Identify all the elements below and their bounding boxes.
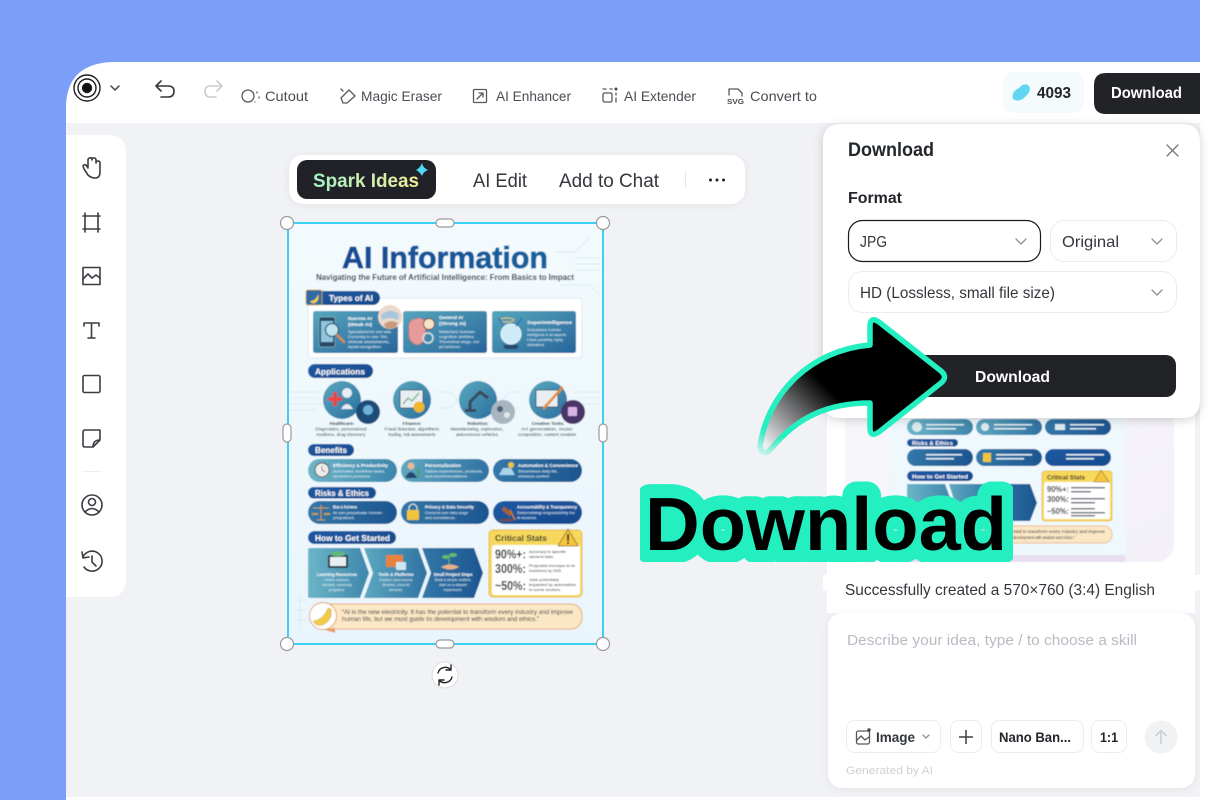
icon: rectangle	[83, 376, 100, 392]
risk: bias: prejudices.	[333, 516, 355, 520]
card: superintelligence	[492, 311, 576, 353]
credits badge	[1003, 72, 1084, 113]
add to chat action: Add to Chat	[559, 171, 660, 192]
stat: 50 percent: in some sectors.	[529, 588, 561, 592]
item: healthcare: Diagnostics, personalized	[316, 426, 367, 432]
dialog title: Download	[848, 140, 934, 161]
risk: accountability: Determining responsibility for	[517, 511, 576, 515]
tool: convert to: SVG	[727, 99, 745, 106]
card: general AI: cognitive abilities.	[439, 335, 475, 339]
tool: AI enhancer: AI Enhancer	[496, 88, 571, 104]
icon: profile	[82, 495, 102, 515]
risk: bias: Bias & Fairness	[333, 504, 358, 510]
preview risks heading	[907, 439, 958, 447]
card: narrow AI: Narrow AI	[348, 316, 372, 321]
stat: 300 percent: Projected increase in AI	[529, 564, 575, 568]
image mode chip: Image	[876, 729, 915, 745]
infographic title: AI Information	[342, 240, 548, 275]
download dialog	[823, 124, 1200, 418]
stat: 300 percent: investment by 2025.	[529, 569, 562, 573]
section: types of AI	[306, 290, 582, 358]
generated image preview	[845, 395, 1174, 562]
icon: banana	[310, 602, 336, 633]
tool: AI extender: AI Extender	[624, 88, 696, 104]
icon: sticky note	[83, 430, 100, 447]
preview benefits row	[907, 419, 1111, 435]
card: superintelligence: Future possibility, highly	[527, 338, 563, 342]
step: tools and platforms: Tools & Platforms	[378, 572, 414, 577]
preview quote: development with wisdom and ethics.”	[1013, 535, 1075, 540]
chat column background	[827, 400, 1195, 613]
risk: privacy: Privacy & Data Security	[425, 504, 475, 510]
preview stats: Critical Stats	[1047, 476, 1086, 482]
heading pill: Risks & Ethics	[315, 489, 370, 498]
section: applications	[308, 364, 585, 437]
infographic subtitle: Navigating the Future of Artificial Intelligence: From Basics to Impact	[316, 273, 574, 282]
item: creative tools	[518, 381, 585, 437]
step: learning resources	[308, 548, 369, 598]
model chip: Nano Ban...	[999, 729, 1071, 745]
spark ideas button	[297, 160, 436, 199]
stat: 50 percent	[495, 578, 576, 593]
heading pill: Applications	[315, 368, 366, 376]
callout label: Download: Download	[645, 482, 1007, 566]
preview risks row	[907, 449, 1111, 466]
quote text	[342, 609, 573, 623]
risk: bias	[308, 501, 397, 524]
heading pill: How to Get Started	[315, 534, 390, 543]
benefit: efficiency	[308, 459, 397, 482]
image mode chip	[846, 720, 940, 752]
stat: 50 percent: ~50%:	[495, 579, 526, 593]
icon: redo	[205, 81, 222, 97]
quote bubble	[310, 602, 582, 633]
step: small project steps: Build a simple chatbot,	[435, 578, 471, 582]
benefit: personalization: and recommendations.	[425, 474, 468, 478]
preview quote	[915, 526, 1112, 543]
generated by AI note: Generated by AI	[846, 765, 933, 777]
more menu dots	[709, 178, 725, 182]
card: superintelligence: Superintelligence	[527, 320, 573, 325]
icon: history	[82, 551, 102, 571]
preview steps	[907, 484, 1037, 521]
callout arrow	[760, 320, 944, 453]
card: general AI: Theoretical stage, not	[439, 340, 479, 344]
step: learning resources: programs.	[329, 588, 345, 592]
step: tools and platforms: libraries, cloud AI	[382, 583, 410, 587]
tool: cutout: Cutout	[265, 88, 308, 104]
floating image toolbar	[289, 155, 745, 204]
tool: cutout	[242, 88, 308, 104]
benefit: personalization: Tailors experiences, products,	[425, 470, 483, 474]
rotate handle	[432, 662, 458, 688]
risk: privacy	[401, 501, 489, 524]
card: general AI: Matches human	[439, 330, 475, 334]
format select	[848, 220, 1040, 262]
benefit: automation: Streamlines daily life,	[518, 470, 558, 474]
tool: convert to	[727, 88, 817, 106]
heading pill	[308, 364, 373, 378]
card: general AI	[403, 311, 487, 353]
card: narrow AI: (Weak AI)	[348, 322, 373, 327]
size select: Original	[1062, 234, 1119, 251]
preview stats	[1042, 470, 1112, 521]
preview stats: 90%+:	[1047, 485, 1069, 494]
item: robotics: Manufacturing, exploration,	[450, 426, 504, 432]
send button	[1144, 720, 1178, 754]
stat: 90 percent: Accuracy in specific	[529, 550, 566, 554]
benefit: personalization: Personalization	[425, 463, 462, 468]
stat: 90 percent: 90%+:	[495, 548, 526, 562]
dialog download button: Download	[975, 369, 1050, 386]
card: superintelligence: debated.	[527, 343, 545, 347]
quality select: HD (Lossless, small file size)	[860, 285, 1055, 302]
quality select	[848, 272, 1176, 312]
stat: 300 percent	[495, 562, 575, 576]
icon: hand	[83, 158, 100, 178]
download button: Download	[1111, 85, 1182, 102]
card: superintelligence: intelligence in all aspects.	[527, 333, 567, 337]
card: general AI: General AI	[439, 315, 463, 320]
quote text: human life, but we must guide its development with wisdom and ethics.”	[342, 616, 539, 623]
item: robotics: Robotics:	[467, 421, 489, 426]
step: tools and platforms: Explore open-source	[379, 578, 413, 582]
benefit: efficiency: streamlines processes.	[333, 474, 371, 478]
icon: image	[83, 268, 100, 284]
risk: accountability: AI decisions.	[517, 516, 537, 520]
add chip	[950, 720, 982, 752]
step: small project steps: experiment.	[444, 588, 462, 592]
ratio chip	[1092, 720, 1126, 752]
step: small project steps	[422, 548, 483, 598]
stat: 300 percent: 300%:	[495, 562, 526, 576]
top toolbar	[66, 62, 1200, 123]
section: benefits	[308, 444, 582, 482]
section: how to get started	[308, 531, 483, 598]
panel: critical stats	[489, 529, 582, 597]
item: robotics	[450, 381, 515, 437]
input placeholder: Describe your idea, type / to choose a skill	[847, 632, 1137, 649]
spark ideas button: Spark Ideas	[313, 171, 419, 192]
stat: 50 percent: impacted by automation	[529, 583, 576, 587]
risk: accountability: Accountability & Transparency	[517, 504, 578, 510]
item: finance	[384, 381, 440, 437]
risk: bias: AI can perpetuate human	[333, 511, 382, 515]
risk: accountability	[493, 501, 582, 524]
step: learning resources: tutorials, university	[322, 583, 352, 587]
step: learning resources: Learning Resources	[317, 572, 358, 577]
benefit: automation	[493, 459, 582, 482]
icon: crop frame	[83, 213, 100, 232]
card: narrow AI: Specialized for one task.	[348, 330, 392, 334]
preview started heading	[907, 471, 973, 481]
card: narrow AI: virtual assistants,	[348, 340, 390, 344]
card: narrow AI: Currently in use: Siri,	[348, 335, 388, 339]
format label: Format	[848, 190, 903, 207]
benefit: personalization	[401, 459, 489, 482]
benefit: efficiency: Efficiency & Productivity	[333, 463, 389, 468]
size select	[1050, 220, 1176, 262]
heading pill	[306, 290, 380, 305]
heading pill: Benefits	[315, 446, 348, 455]
chat status message: Successfully created a 570×760 (3:4) English	[845, 582, 1155, 599]
preview stats: ~50%:	[1047, 507, 1069, 516]
heading pill: Types of AI	[329, 294, 373, 303]
heading pill	[308, 487, 376, 498]
quote text: “AI is the new electricity. It has the potential to transform every industry and improve	[342, 609, 573, 616]
stat: 50 percent: Jobs potentially	[529, 578, 559, 582]
item: healthcare	[316, 381, 380, 437]
stat: 90 percent: narrow AI tasks.	[529, 555, 554, 559]
item: creative tools: composition, content creation	[518, 432, 577, 437]
step: small project steps: Small Project Steps	[433, 572, 473, 577]
risk: privacy: Concerns over data usage	[425, 511, 468, 515]
benefit: efficiency: Automates workflow tasks,	[333, 470, 385, 474]
section: risks and ethics	[308, 487, 582, 524]
card: superintelligence: Surpasses human	[527, 328, 561, 332]
card: narrow AI	[313, 311, 398, 353]
item: finance: trading, risk assessments	[388, 432, 436, 437]
icon: warning triangle	[558, 529, 578, 546]
callout label: Download: Download	[645, 482, 1007, 566]
risk: privacy: and surveillance.	[425, 516, 456, 520]
item: healthcare: Healthcare:	[329, 421, 355, 426]
step: small project steps: start on a dataset	[439, 583, 467, 587]
benefit: automation: enhances comfort.	[518, 474, 550, 478]
preview risks heading: Risks & Ethics	[912, 441, 953, 447]
credits badge: 4093	[1037, 85, 1071, 102]
selected infographic	[288, 223, 603, 644]
item: robotics: autonomous vehicles	[456, 432, 499, 437]
dialog download button	[848, 355, 1176, 397]
ratio chip: 1:1	[1100, 729, 1118, 745]
item: finance: Finance:	[403, 421, 422, 426]
preview started heading: How to Get Started	[912, 474, 968, 480]
stat: 90 percent	[495, 548, 566, 562]
icon: undo	[156, 81, 174, 97]
card: general AI: (Strong AI)	[439, 321, 467, 326]
icon: logo	[74, 75, 100, 101]
preview stats: 300%:	[1047, 495, 1069, 504]
icon: close	[1167, 145, 1178, 156]
format select: JPG	[860, 234, 887, 251]
selection frame and handles	[280, 216, 610, 650]
stats heading: Critical Stats	[495, 533, 547, 543]
preview quote: ntial to transform every industry and improve	[1013, 529, 1106, 534]
download button	[1094, 73, 1200, 114]
photo badge	[378, 305, 402, 329]
item: creative tools: Creative Tools:	[532, 421, 565, 426]
left tool panel	[66, 135, 126, 597]
item: finance: Fraud detection, algorithmic	[384, 426, 440, 432]
heading pill	[308, 531, 396, 544]
card: narrow AI: facial recognition.	[348, 345, 382, 349]
step: tools and platforms: services.	[389, 588, 403, 592]
card: general AI: yet achieved.	[439, 345, 461, 349]
tool: convert to: Convert to	[750, 88, 817, 104]
item: healthcare: medicine, drug discovery	[316, 432, 366, 437]
icon: logo menu chevron	[111, 86, 119, 90]
item: creative tools: Art generation, music	[521, 426, 574, 432]
benefit: automation: Automation & Convenience	[518, 463, 579, 468]
AI edit action: AI Edit	[473, 171, 528, 192]
tool: magic eraser: Magic Eraser	[361, 88, 442, 104]
heading pill	[308, 444, 354, 456]
icon: text T	[84, 323, 99, 338]
model chip	[992, 720, 1084, 752]
step: learning resources: Online courses,	[325, 578, 349, 582]
step: tools and platforms	[364, 548, 427, 598]
chat input panel	[828, 613, 1195, 788]
